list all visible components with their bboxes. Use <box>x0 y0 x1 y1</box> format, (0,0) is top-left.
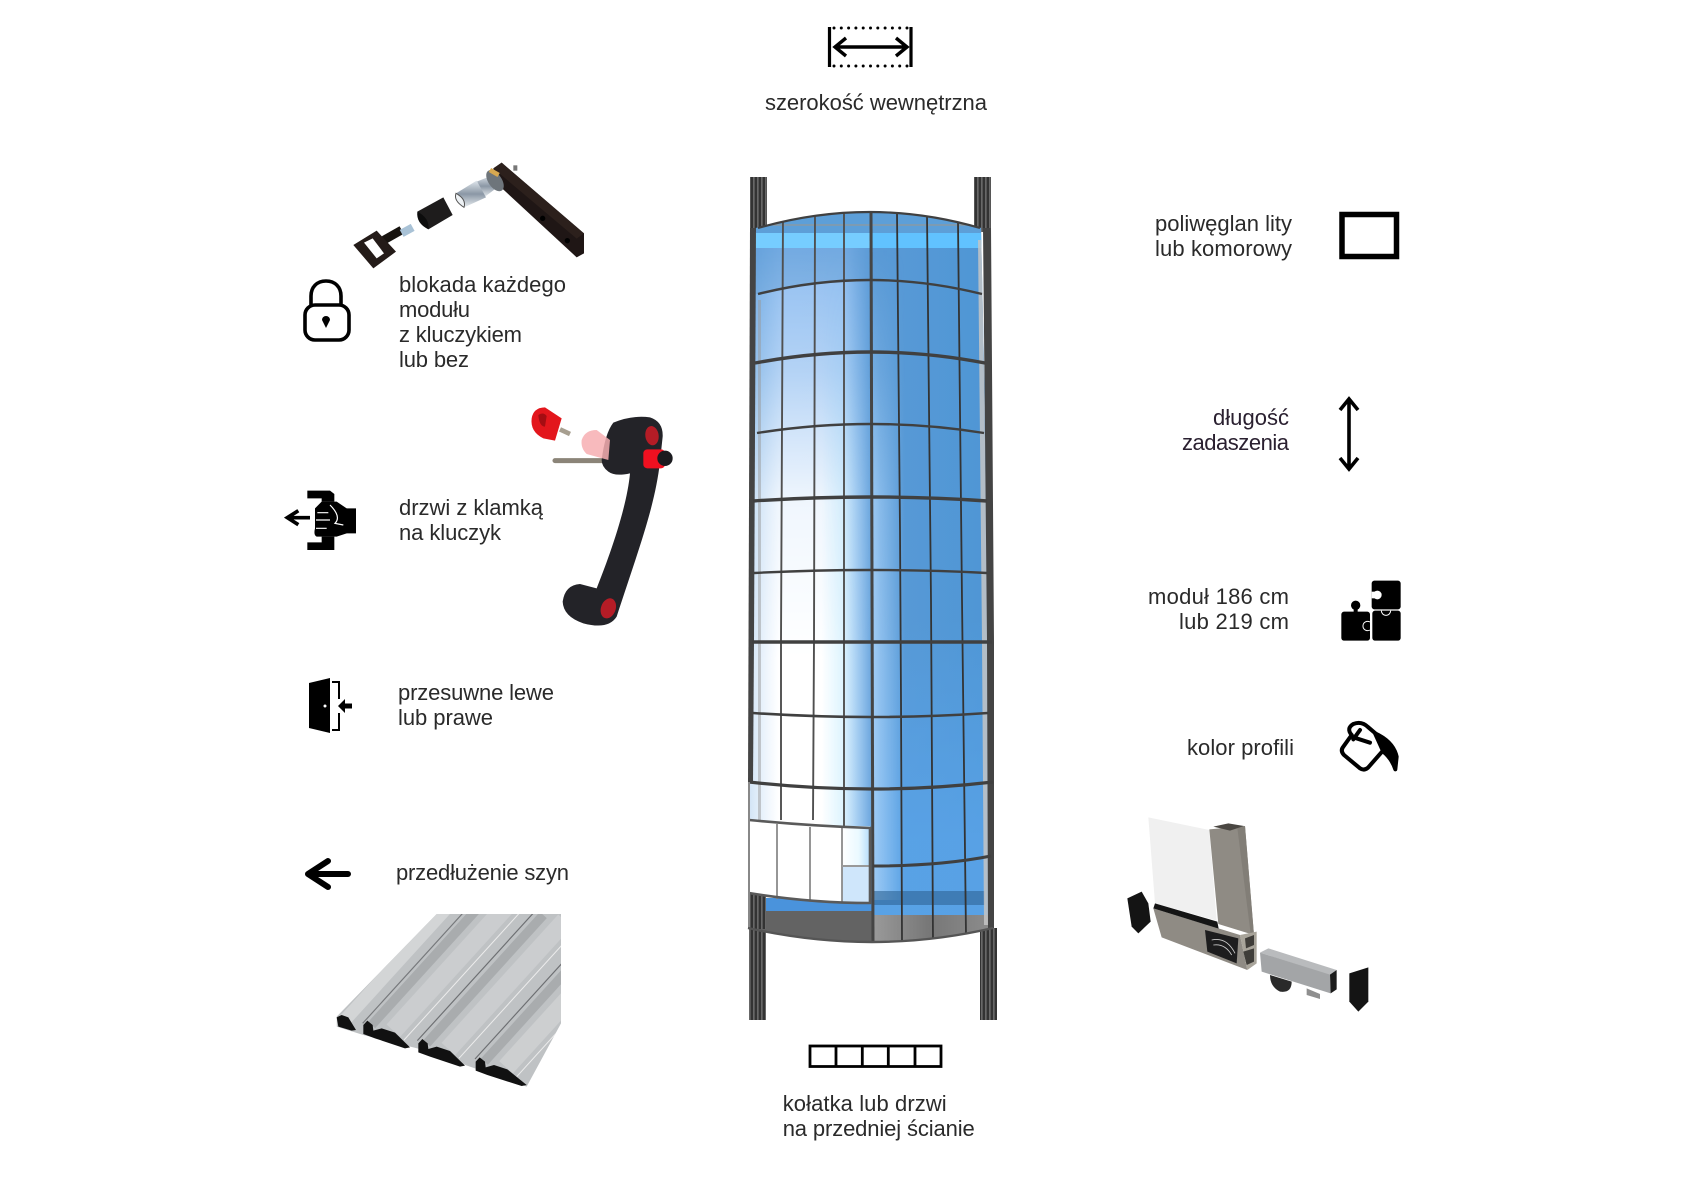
photo: profile cross-section <box>1127 817 1368 1012</box>
text: lock per module: z kluczykiem <box>399 322 522 347</box>
text: door with handle: na kluczyk <box>399 520 502 545</box>
side frames <box>748 228 994 928</box>
text: internal width: szerokość wewnętrzna <box>765 90 988 115</box>
icon: front wall chambers <box>810 1046 941 1066</box>
text: roof length <box>1182 405 1290 455</box>
text: module size <box>1148 584 1289 634</box>
text: module size: moduł 186 cm <box>1148 584 1289 609</box>
text: polycarbonate: poliwęglan lity <box>1155 211 1292 236</box>
text: profile colour: kolor profili <box>1187 735 1294 760</box>
text: sliding direction <box>398 680 554 730</box>
icon: padlock <box>305 281 349 340</box>
text: sliding direction: przesuwne lewe <box>398 680 554 705</box>
text: front wall option: na przedniej ścianie <box>783 1116 975 1141</box>
icon: polycarbonate pane <box>1342 214 1396 256</box>
door <box>749 782 870 928</box>
text: sliding direction: lub prawe <box>398 705 493 730</box>
arches <box>749 212 993 866</box>
base curve <box>748 928 993 942</box>
text: module size: lub 219 cm <box>1179 609 1289 634</box>
text: lock per module: blokada każdego <box>399 272 566 297</box>
mullions <box>781 210 966 942</box>
photo: rails <box>336 914 561 1086</box>
photo: key handle <box>531 407 673 626</box>
text: door with handle <box>399 495 544 545</box>
icon: left arrow <box>308 861 348 887</box>
icon: internal width <box>830 27 911 67</box>
text: polycarbonate: lub komorowy <box>1155 236 1292 261</box>
text: roof length: długość <box>1213 405 1289 430</box>
icon: sliding door <box>309 678 352 733</box>
text: front wall option <box>783 1091 975 1141</box>
tower: enclosure module view <box>745 177 1000 1020</box>
text: lock per module: modułu <box>399 297 470 322</box>
icon: paint bucket <box>1342 723 1397 770</box>
glazing <box>750 213 988 941</box>
text: lock per module: lub bez <box>399 347 469 372</box>
icon: puzzle <box>1341 581 1401 641</box>
text: roof length: zadaszenia <box>1182 430 1290 455</box>
text: polycarbonate <box>1155 211 1292 261</box>
rails <box>749 177 997 1020</box>
photo: lock parts <box>353 163 584 268</box>
text: lock per module <box>399 272 566 372</box>
icon: length arrow <box>1340 399 1358 469</box>
text: door with handle: drzwi z klamką <box>399 495 544 520</box>
text: rail extension: przedłużenie szyn <box>396 860 569 885</box>
icon: door with handle <box>287 491 356 550</box>
text: front wall option: kołatka lub drzwi <box>783 1091 947 1116</box>
